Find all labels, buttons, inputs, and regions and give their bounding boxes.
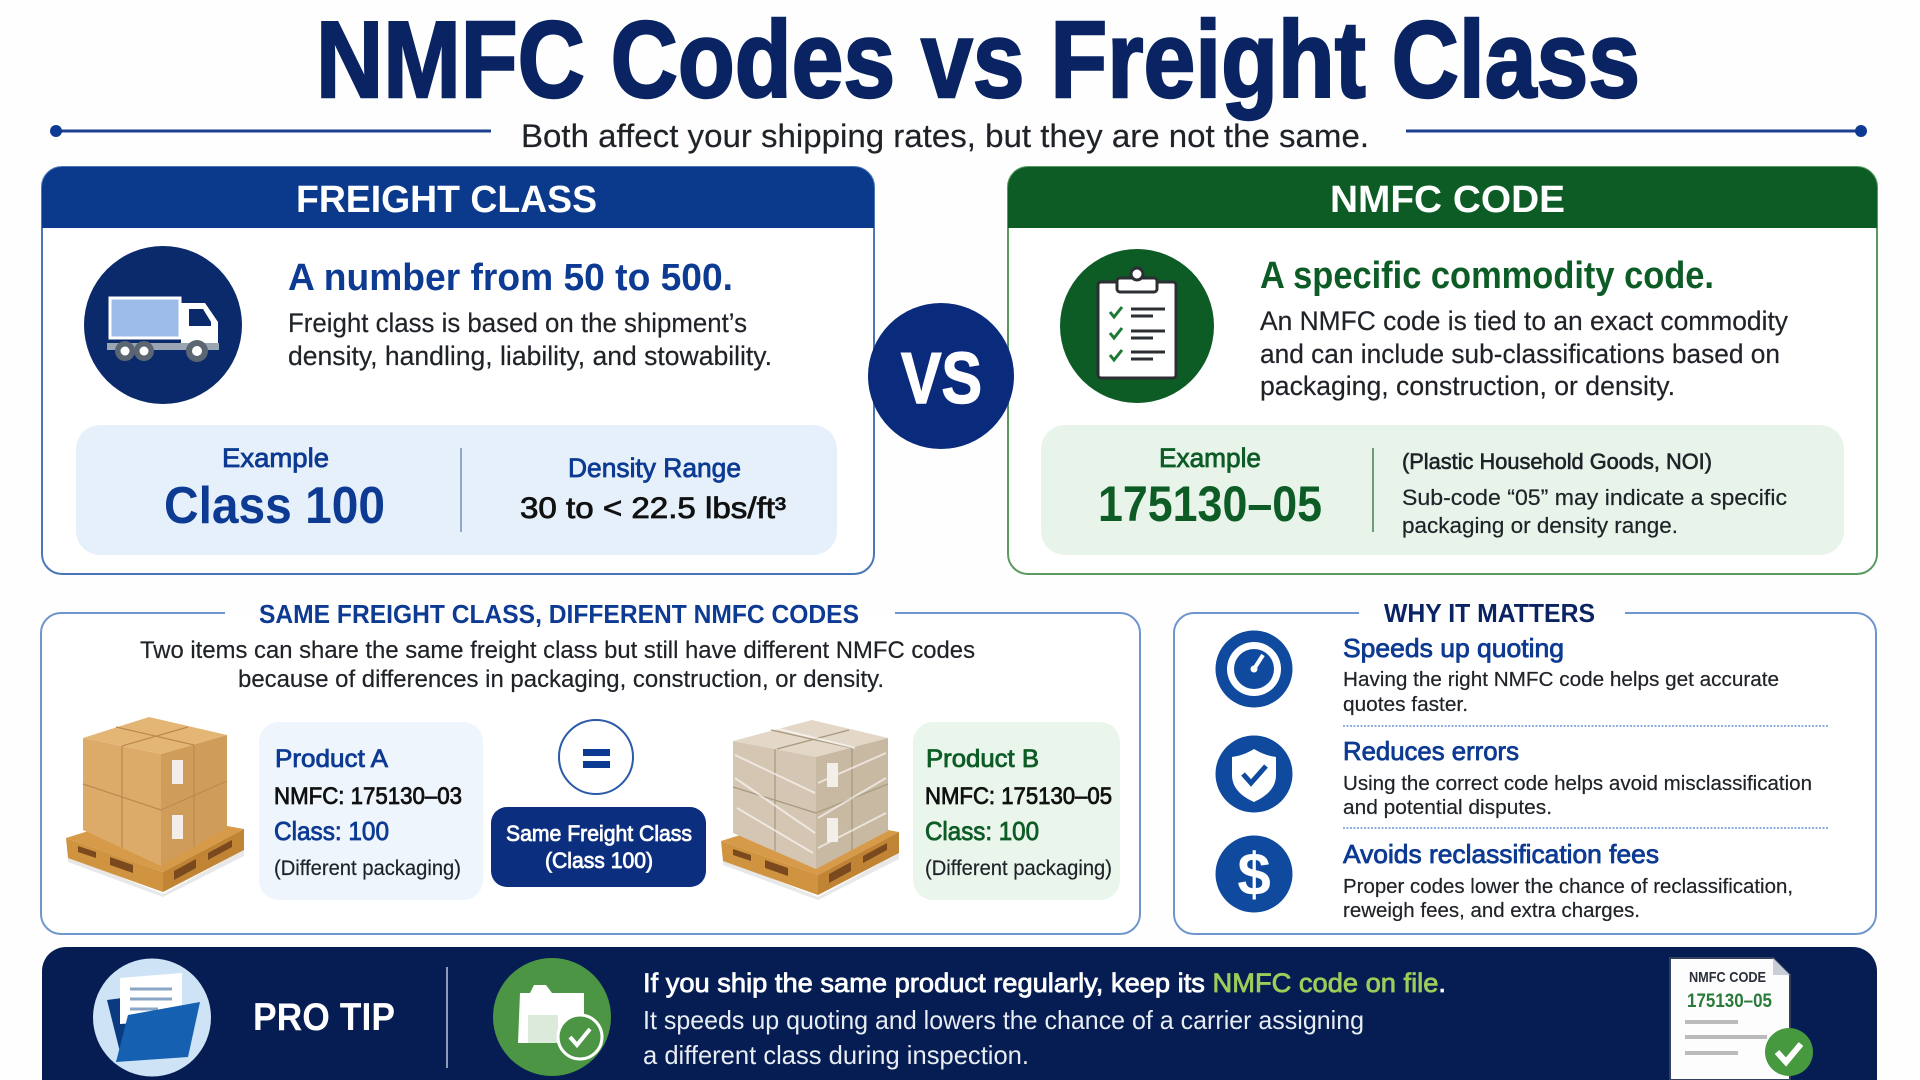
card: product a: Class: 100 <box>274 816 389 846</box>
card: product a: (Different packaging) <box>274 857 461 880</box>
card: product b: NMFC: 175130–05 <box>925 783 1112 810</box>
icon: truck <box>84 246 242 404</box>
vs badge: VS <box>901 339 982 419</box>
subheading: commodity code: A specific commodity code. <box>1260 255 1714 297</box>
icon: clipboard <box>1060 249 1214 403</box>
example box: 175130-05: Sub-code “05” may indicate a specific <box>1402 485 1787 510</box>
heading: freight class: FREIGHT CLASS <box>296 179 597 221</box>
icon: shield with check <box>1216 736 1292 812</box>
card: product a: Product A <box>275 745 388 773</box>
illustration: cardboard boxes on pallet <box>66 717 244 897</box>
icon: nmfc code document: 175130–05 <box>1687 991 1772 1012</box>
card: product a: NMFC: 175130–03 <box>274 783 462 810</box>
icon: folder with check <box>493 958 611 1076</box>
item: avoids reclassification fees: reweigh fees, and extra charges. <box>1343 899 1640 922</box>
item: speeds up quoting: Speeds up quoting <box>1343 633 1564 663</box>
example box: class 100: Density Range <box>568 453 741 483</box>
icon: nmfc code document <box>1670 958 1813 1080</box>
icon: speedometer <box>1216 630 1292 708</box>
description: freight class <box>288 308 772 371</box>
intro text: because of differences in packaging, construction, or density. <box>238 666 884 693</box>
description: nmfc code: and can include sub-classifications based on <box>1260 339 1780 369</box>
tip text: If you ship the same product regularly, keep its NMFC code on file. <box>643 968 1446 998</box>
panel: nmfc code <box>1008 167 1877 574</box>
badge: same freight class: (Class 100) <box>545 848 653 873</box>
example box: class 100 <box>76 425 837 555</box>
panel: same freight class, different nmfc codes <box>41 599 1140 934</box>
example box: 175130-05: 175130–05 <box>1098 476 1322 532</box>
panel: why it matters <box>1174 598 1876 934</box>
item: reduces errors: Reduces errors <box>1343 736 1519 766</box>
item: speeds up quoting: quotes faster. <box>1343 693 1468 716</box>
example box: class 100: Example <box>222 443 329 473</box>
intro text: Two items can share the same freight class but still have different NMFC codes <box>140 637 975 664</box>
description: nmfc code: packaging, construction, or density. <box>1260 371 1675 401</box>
icon: open folder <box>93 958 211 1076</box>
item: avoids reclassification fees: Proper codes lower the chance of reclassification, <box>1343 875 1793 898</box>
heading: nmfc code: NMFC CODE <box>1330 179 1565 221</box>
item: avoids reclassification fees <box>1343 839 1793 922</box>
tip text: a different class during inspection. <box>643 1040 1029 1070</box>
icon: equals sign <box>559 720 633 794</box>
description: nmfc code: An NMFC code is tied to an exact commodity <box>1260 306 1789 336</box>
title: NMFC Codes vs Freight Class <box>316 0 1640 121</box>
subheading: number range: A number from 50 to 500. <box>288 257 733 299</box>
tip text: It speeds up quoting and lowers the chance of a carrier assigning <box>643 1005 1364 1035</box>
card: product b: Product B <box>926 745 1039 773</box>
item: speeds up quoting: Having the right NMFC code helps get accurate <box>1343 668 1779 691</box>
example box: 175130-05: Example <box>1159 443 1261 473</box>
panel: freight class <box>42 167 874 574</box>
item: reduces errors: and potential disputes. <box>1343 796 1552 819</box>
item: speeds up quoting <box>1343 633 1779 716</box>
heading: same freight class: SAME FREIGHT CLASS, DIFFERENT NMFC CODES <box>259 599 859 629</box>
card: product b: (Different packaging) <box>925 857 1112 880</box>
illustration: shrink-wrapped boxes on pallet <box>721 720 899 900</box>
card: product b <box>913 722 1120 900</box>
icon: dollar sign: $ <box>1237 841 1271 908</box>
card: product b: Class: 100 <box>925 816 1039 846</box>
icon: nmfc code document: NMFC CODE <box>1689 969 1766 986</box>
item: reduces errors: Using the correct code helps avoid misclassification <box>1343 772 1812 795</box>
description: freight class: density, handling, liability, and stowability. <box>288 341 772 371</box>
example box: class 100: Class 100 <box>164 477 385 535</box>
icon: dollar sign <box>1216 836 1292 912</box>
tip text <box>643 968 1446 1070</box>
example box: class 100: 30 to < 22.5 lbs/ft³ <box>520 492 786 525</box>
badge: same freight class <box>491 807 706 887</box>
description: nmfc code <box>1260 306 1789 401</box>
description: freight class: Freight class is based on the shipment’s <box>288 308 747 338</box>
banner: pro tip <box>42 947 1877 1080</box>
label: pro tip: PRO TIP <box>253 996 395 1039</box>
example box: 175130-05: packaging or density range. <box>1402 513 1678 538</box>
item: avoids reclassification fees: Avoids reclassification fees <box>1343 839 1659 869</box>
subtitle with rules <box>50 118 1867 154</box>
badge: same freight class: Same Freight Class <box>506 821 692 846</box>
vs badge <box>868 303 1014 449</box>
subtitle with rules: Both affect your shipping rates, but they are not the same. <box>521 118 1369 154</box>
item: reduces errors <box>1343 736 1812 819</box>
heading: why it matters: WHY IT MATTERS <box>1384 598 1595 628</box>
example box: 175130-05: (Plastic Household Goods, NOI) <box>1402 449 1712 474</box>
example box: 175130-05 <box>1041 425 1844 555</box>
intro text <box>140 637 975 693</box>
card: product a <box>259 722 483 900</box>
